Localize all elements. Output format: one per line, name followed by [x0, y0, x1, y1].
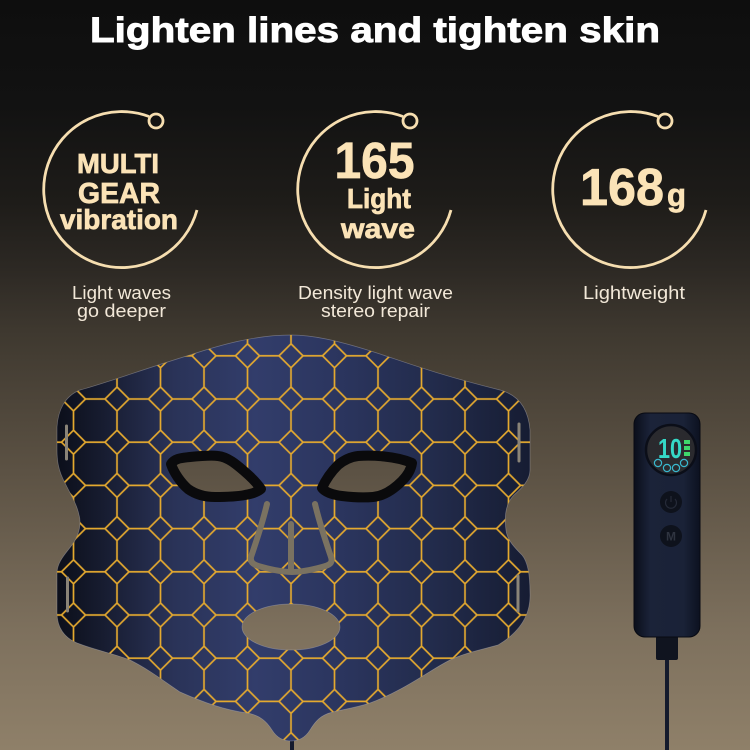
right eye opening rim [322, 456, 412, 497]
caption 1: go deeper [77, 301, 166, 321]
remote body [634, 413, 700, 637]
display [646, 425, 696, 475]
ring 1 text: GEAR [78, 178, 160, 210]
display digits: 10 [658, 433, 682, 464]
caption 1 [72, 283, 171, 321]
side strap slots [66, 424, 519, 611]
ring 1 text: vibration [60, 204, 178, 235]
feature: multi gear vibration [44, 112, 197, 321]
ring 2 text: wave [340, 213, 415, 244]
feature: 168g lightweight [553, 112, 706, 303]
ring 3 text: 168 [580, 159, 664, 217]
level bars [684, 440, 690, 456]
icon: ring 2 [298, 112, 451, 268]
icon: ring 3 [553, 112, 706, 268]
remote controller [634, 413, 700, 750]
caption 2: Density light wave [298, 283, 453, 303]
caption 2: stereo repair [321, 301, 430, 321]
ring 3 text: g [667, 177, 686, 213]
mode button [660, 525, 682, 547]
power button [660, 491, 682, 513]
ring 2 text [334, 132, 415, 244]
left eye opening rim [171, 456, 261, 497]
nose clip [251, 504, 332, 572]
caption 1: Light waves [72, 283, 171, 303]
ring 2 text: Light [347, 183, 411, 214]
feature: 165 light wave [298, 112, 453, 321]
remote cable [665, 655, 669, 750]
mask body [57, 335, 530, 741]
caption 2 [298, 283, 453, 321]
ring 1 text: MULTI [77, 148, 159, 179]
ring 1 text [60, 148, 178, 235]
title: Lighten lines and tighten skin [90, 11, 660, 50]
icon: ring 1 [44, 112, 197, 268]
LED face mask [57, 335, 530, 750]
caption 3: Lightweight [583, 283, 685, 303]
gold hexagon circuit grid [57, 335, 530, 741]
ring 2 text: 165 [334, 132, 414, 189]
mode icons [654, 459, 688, 472]
mode button: M [666, 530, 676, 544]
remote connector [656, 636, 678, 660]
mask cable [290, 738, 294, 750]
